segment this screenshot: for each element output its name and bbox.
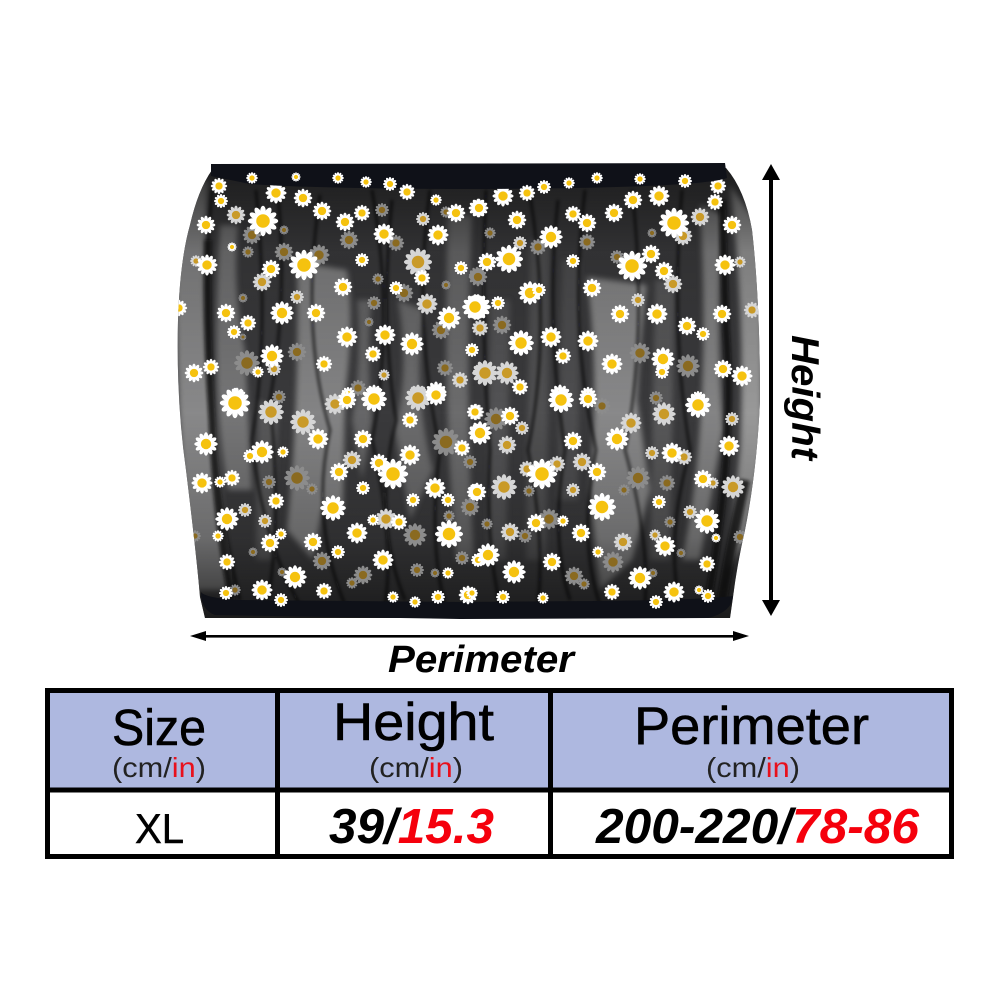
table row background bbox=[48, 790, 951, 856]
arrow: perimeter bbox=[190, 631, 749, 641]
dark fold lines bbox=[206, 190, 745, 605]
header: perimeter: (cm/in) bbox=[706, 752, 800, 783]
header: size bbox=[112, 699, 206, 783]
mid-tone daisies bbox=[190, 206, 760, 567]
label: perimeter: Perimeter bbox=[388, 639, 576, 681]
product photo: sheer daisy tube skirt bbox=[170, 160, 770, 630]
header: size: (cm/in) bbox=[112, 752, 206, 783]
header: height: Height bbox=[333, 693, 494, 752]
dim daisies behind the fabric bbox=[189, 203, 747, 596]
header: perimeter: Perimeter bbox=[634, 697, 869, 756]
value: height: 39/15.3 bbox=[329, 800, 494, 854]
hem band bottom bbox=[201, 592, 733, 619]
daisies on the bands and hem bbox=[219, 172, 715, 609]
table header background bbox=[48, 691, 951, 790]
top and bottom fabric shading bbox=[170, 160, 770, 620]
arrow: height bbox=[762, 164, 780, 616]
table grid bbox=[46, 690, 953, 857]
value: size XL: XL bbox=[135, 805, 184, 852]
sheer fabric base bbox=[170, 160, 770, 630]
label: height: Height bbox=[783, 335, 826, 462]
bright daisies bbox=[171, 178, 753, 601]
header: height: (cm/in) bbox=[369, 752, 463, 783]
header: height bbox=[333, 693, 494, 783]
waistband top bbox=[211, 163, 727, 189]
header: perimeter bbox=[634, 697, 869, 783]
size table bbox=[46, 690, 953, 857]
header: size: Size bbox=[112, 699, 206, 756]
value: perimeter: 200-220/78-86 bbox=[595, 800, 920, 854]
